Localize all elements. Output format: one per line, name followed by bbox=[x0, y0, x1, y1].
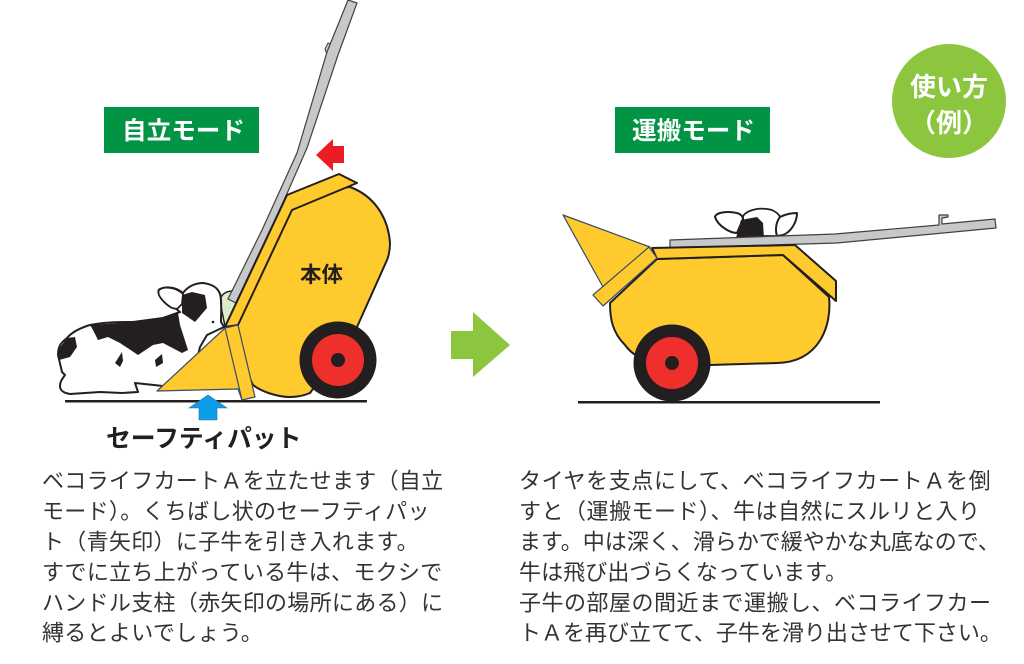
panel: transport mode bbox=[563, 107, 996, 404]
icon: red arrow bbox=[316, 139, 344, 171]
text block: transport instructions: タイヤを支点にして、ベコライフカートＡを倒 bbox=[519, 468, 991, 494]
safety pad bbox=[563, 215, 657, 306]
icon: wheel bbox=[300, 322, 376, 398]
text block: transport instructions: トＡを再び立てて、子牛を滑り出させて下さい。 bbox=[519, 620, 1002, 646]
illustration: calf lying down bbox=[58, 283, 240, 394]
text block: self-standing instructions: モード）。くちばし状のセーフティパッ bbox=[42, 499, 430, 524]
text block: transport instructions: ます。中は深く、滑らかで緩やかな丸底なので、 bbox=[519, 530, 1000, 554]
icon: wheel bbox=[634, 324, 710, 402]
icon: blue arrow bbox=[189, 395, 227, 420]
text block: self-standing instructions: ハンドル支柱（赤矢印の場所にある）に bbox=[42, 590, 443, 616]
badge: how to use: （例） bbox=[910, 108, 988, 138]
text block: self-standing instructions: ベコライフカートＡを立たせます（自立 bbox=[42, 468, 443, 494]
panel: self-standing mode bbox=[58, 0, 390, 453]
text block: transport instructions: 子牛の部屋の間近まで運搬し、ベコライフカー bbox=[519, 590, 992, 616]
text block: self-standing instructions: すでに立ち上がっている牛は、モクシで bbox=[42, 560, 443, 585]
label: transport mode bbox=[615, 107, 770, 153]
label: self-standing mode bbox=[104, 107, 259, 153]
label: self-standing mode: 自立モード bbox=[122, 117, 245, 145]
icon: handle bbox=[670, 215, 996, 248]
illustration: calf head bbox=[715, 209, 797, 238]
cart body bbox=[225, 174, 390, 397]
ground line bbox=[578, 401, 880, 404]
text block: self-standing instructions: 縛るとよいでしょう。 bbox=[42, 620, 263, 646]
label: safety pad: セーフティパット bbox=[106, 425, 301, 453]
label: transport mode: 運搬モード bbox=[632, 117, 755, 145]
icon: transition arrow bbox=[451, 312, 510, 377]
text block: transport instructions: すと（運搬モード）、牛は自然にスルリと入り bbox=[519, 499, 981, 524]
badge: how to use bbox=[892, 44, 1006, 158]
cart body bbox=[610, 245, 836, 365]
text block: self-standing instructions bbox=[42, 468, 443, 646]
badge: how to use: 使い方 bbox=[910, 72, 988, 102]
safety pad bbox=[157, 325, 255, 400]
text block: transport instructions: 牛は飛び出づらくなっています。 bbox=[519, 560, 847, 585]
ground line bbox=[65, 400, 367, 402]
text block: transport instructions bbox=[519, 468, 1002, 646]
label: main body: 本体 bbox=[300, 263, 344, 287]
text block: self-standing instructions: ト（青矢印）に子牛を引き入れます。 bbox=[42, 530, 419, 554]
icon: handle bbox=[228, 0, 357, 303]
